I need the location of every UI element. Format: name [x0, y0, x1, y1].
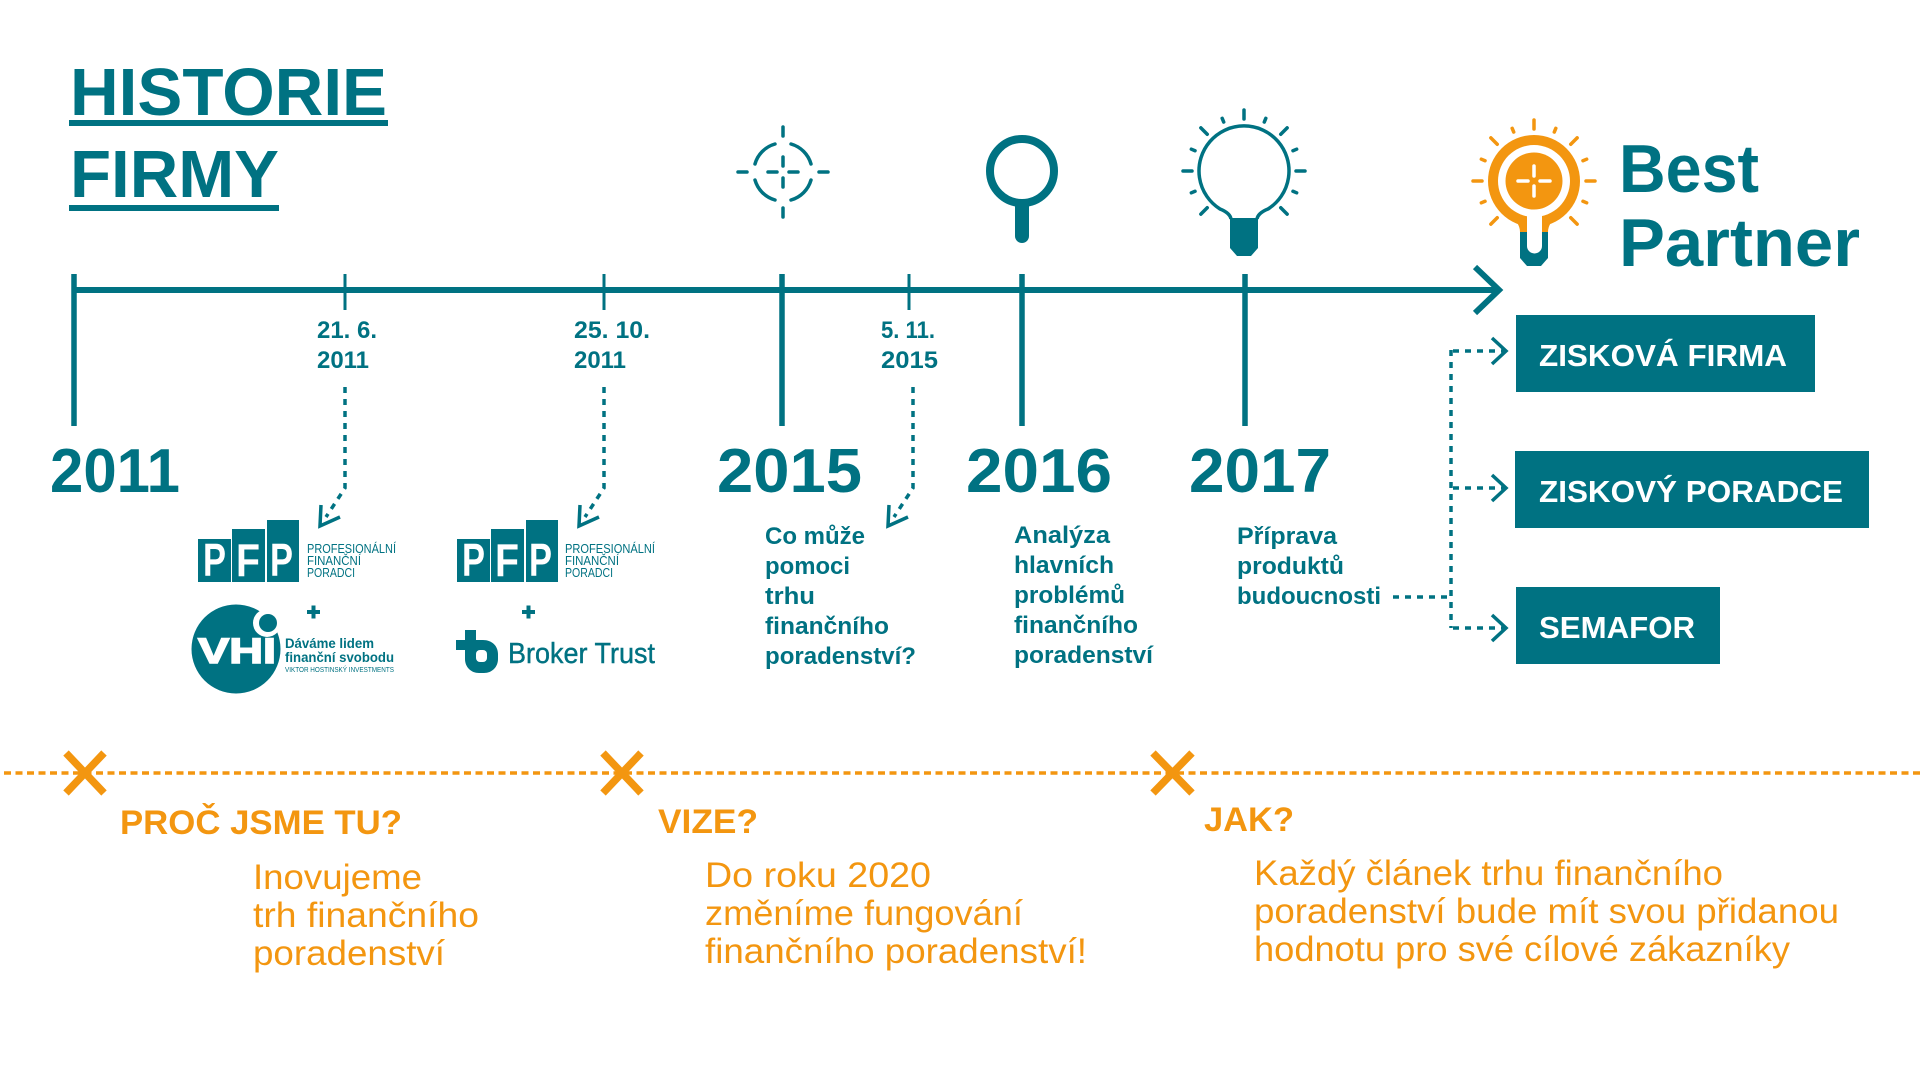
block: why: poradenství	[253, 934, 445, 973]
text: 2015: finančního	[765, 613, 889, 640]
year labels: 2016	[966, 437, 1112, 506]
logo: PFP first: PROFESIONÁLNÍ	[307, 541, 396, 556]
block: vision: VIZE?	[658, 803, 758, 841]
year labels: 2015	[717, 437, 862, 506]
text: 2016: finančního	[1014, 612, 1138, 639]
icon: magnifier	[990, 139, 1054, 243]
text: 2016: hlavních	[1014, 552, 1114, 579]
logo: PFP second: PROFESIONÁLNÍ	[565, 541, 655, 556]
date labels: 2011	[317, 347, 369, 374]
logo: VHI: VIKTOR HOSTINSKÝ INVESTMENTS	[285, 665, 394, 674]
logo icon	[1473, 120, 1595, 266]
block: why: trh finančního	[253, 896, 479, 935]
title: FIRMY	[70, 137, 279, 212]
block: how: JAK?	[1204, 801, 1294, 839]
date labels: 5. 11.	[881, 317, 935, 344]
logo: PFP second: P	[462, 534, 485, 586]
block: vision	[658, 803, 1087, 971]
text: 2015: Co může	[765, 523, 865, 550]
text: 2017	[1237, 523, 1381, 610]
logo: VHI	[192, 604, 394, 694]
block: why	[120, 803, 479, 973]
timeline axis	[74, 267, 1499, 426]
block: vision: změníme fungování	[705, 894, 1023, 933]
dashed connector to products	[1393, 338, 1506, 641]
text: 2016: problémů	[1014, 582, 1125, 609]
x markers	[66, 753, 1192, 793]
logo: VHI: finanční svobodu	[285, 649, 394, 665]
text: 2017: Příprava	[1237, 523, 1338, 550]
orange dashed divider	[4, 771, 1920, 775]
year labels	[50, 437, 1331, 506]
block: how	[1204, 801, 1839, 969]
year labels: 2017	[1189, 437, 1331, 506]
logo: PFP first	[198, 520, 396, 586]
text: 2015: trhu	[765, 583, 815, 610]
product box: Semafor	[1516, 587, 1720, 664]
date labels: 2011	[574, 347, 626, 374]
date labels: 25. 10.	[574, 317, 650, 344]
logo: PFP second: FINANČNÍ	[565, 553, 619, 568]
dotted arrows from dates	[320, 387, 913, 526]
logo: Best Partner: Best	[1619, 131, 1759, 207]
product box: Ziskový poradce: ZISKOVÝ PORADCE	[1539, 474, 1843, 509]
text: 2016: poradenství	[1014, 642, 1154, 669]
block: how: Každý článek trhu finančního	[1254, 854, 1723, 893]
product box: Zisková firma: ZISKOVÁ FIRMA	[1539, 338, 1787, 373]
text: 2015: poradenství?	[765, 643, 916, 670]
logo: VHI: Dáváme lidem	[285, 635, 374, 651]
title: HISTORIE	[70, 55, 387, 130]
logo: PFP second: PORADCI	[565, 566, 613, 580]
logo: PFP first: FINANČNÍ	[307, 553, 361, 568]
title	[69, 55, 388, 212]
logo: Broker Trust: Broker Trust	[508, 638, 655, 670]
block: why: Inovujeme	[253, 858, 422, 897]
block: vision: Do roku 2020	[705, 856, 931, 895]
product box: Semafor: SEMAFOR	[1539, 610, 1695, 645]
text: 2017: produktů	[1237, 553, 1344, 580]
year labels: 2011	[50, 437, 180, 506]
logo: PFP first: P	[203, 534, 226, 586]
logo: Broker Trust	[456, 630, 655, 673]
text: 2015	[765, 523, 916, 670]
text: 2017: budoucnosti	[1237, 583, 1381, 610]
logo: PFP first: F	[236, 534, 260, 586]
block: how: poradenství bude mít svou přidanou	[1254, 892, 1839, 931]
text: 2015: pomoci	[765, 553, 850, 580]
text: 2016: Analýza	[1014, 522, 1111, 549]
block: why: PROČ JSME TU?	[120, 803, 402, 842]
logo: PFP second	[457, 520, 655, 586]
date labels	[317, 317, 938, 374]
icon: target	[738, 127, 828, 217]
product box: Ziskový poradce	[1515, 451, 1869, 528]
product box: Zisková firma	[1516, 315, 1815, 392]
block: vision: finančního poradenství!	[705, 932, 1087, 971]
logo: PFP second: F	[495, 534, 519, 586]
logo: Best Partner: Partner	[1619, 205, 1860, 281]
text: 2016	[1014, 522, 1154, 669]
icon: light bulb	[1183, 110, 1305, 256]
date labels: 21. 6.	[317, 317, 377, 344]
logo: PFP first: P	[270, 534, 293, 586]
logo: PFP first: PORADCI	[307, 566, 355, 580]
date labels: 2015	[881, 347, 938, 374]
logo: VHI: VHI	[198, 632, 276, 671]
block: how: hodnotu pro své cílové zákazníky	[1254, 930, 1791, 969]
plus signs	[307, 606, 535, 618]
logo: Best Partner	[1473, 120, 1860, 281]
logo: PFP second: P	[529, 534, 552, 586]
